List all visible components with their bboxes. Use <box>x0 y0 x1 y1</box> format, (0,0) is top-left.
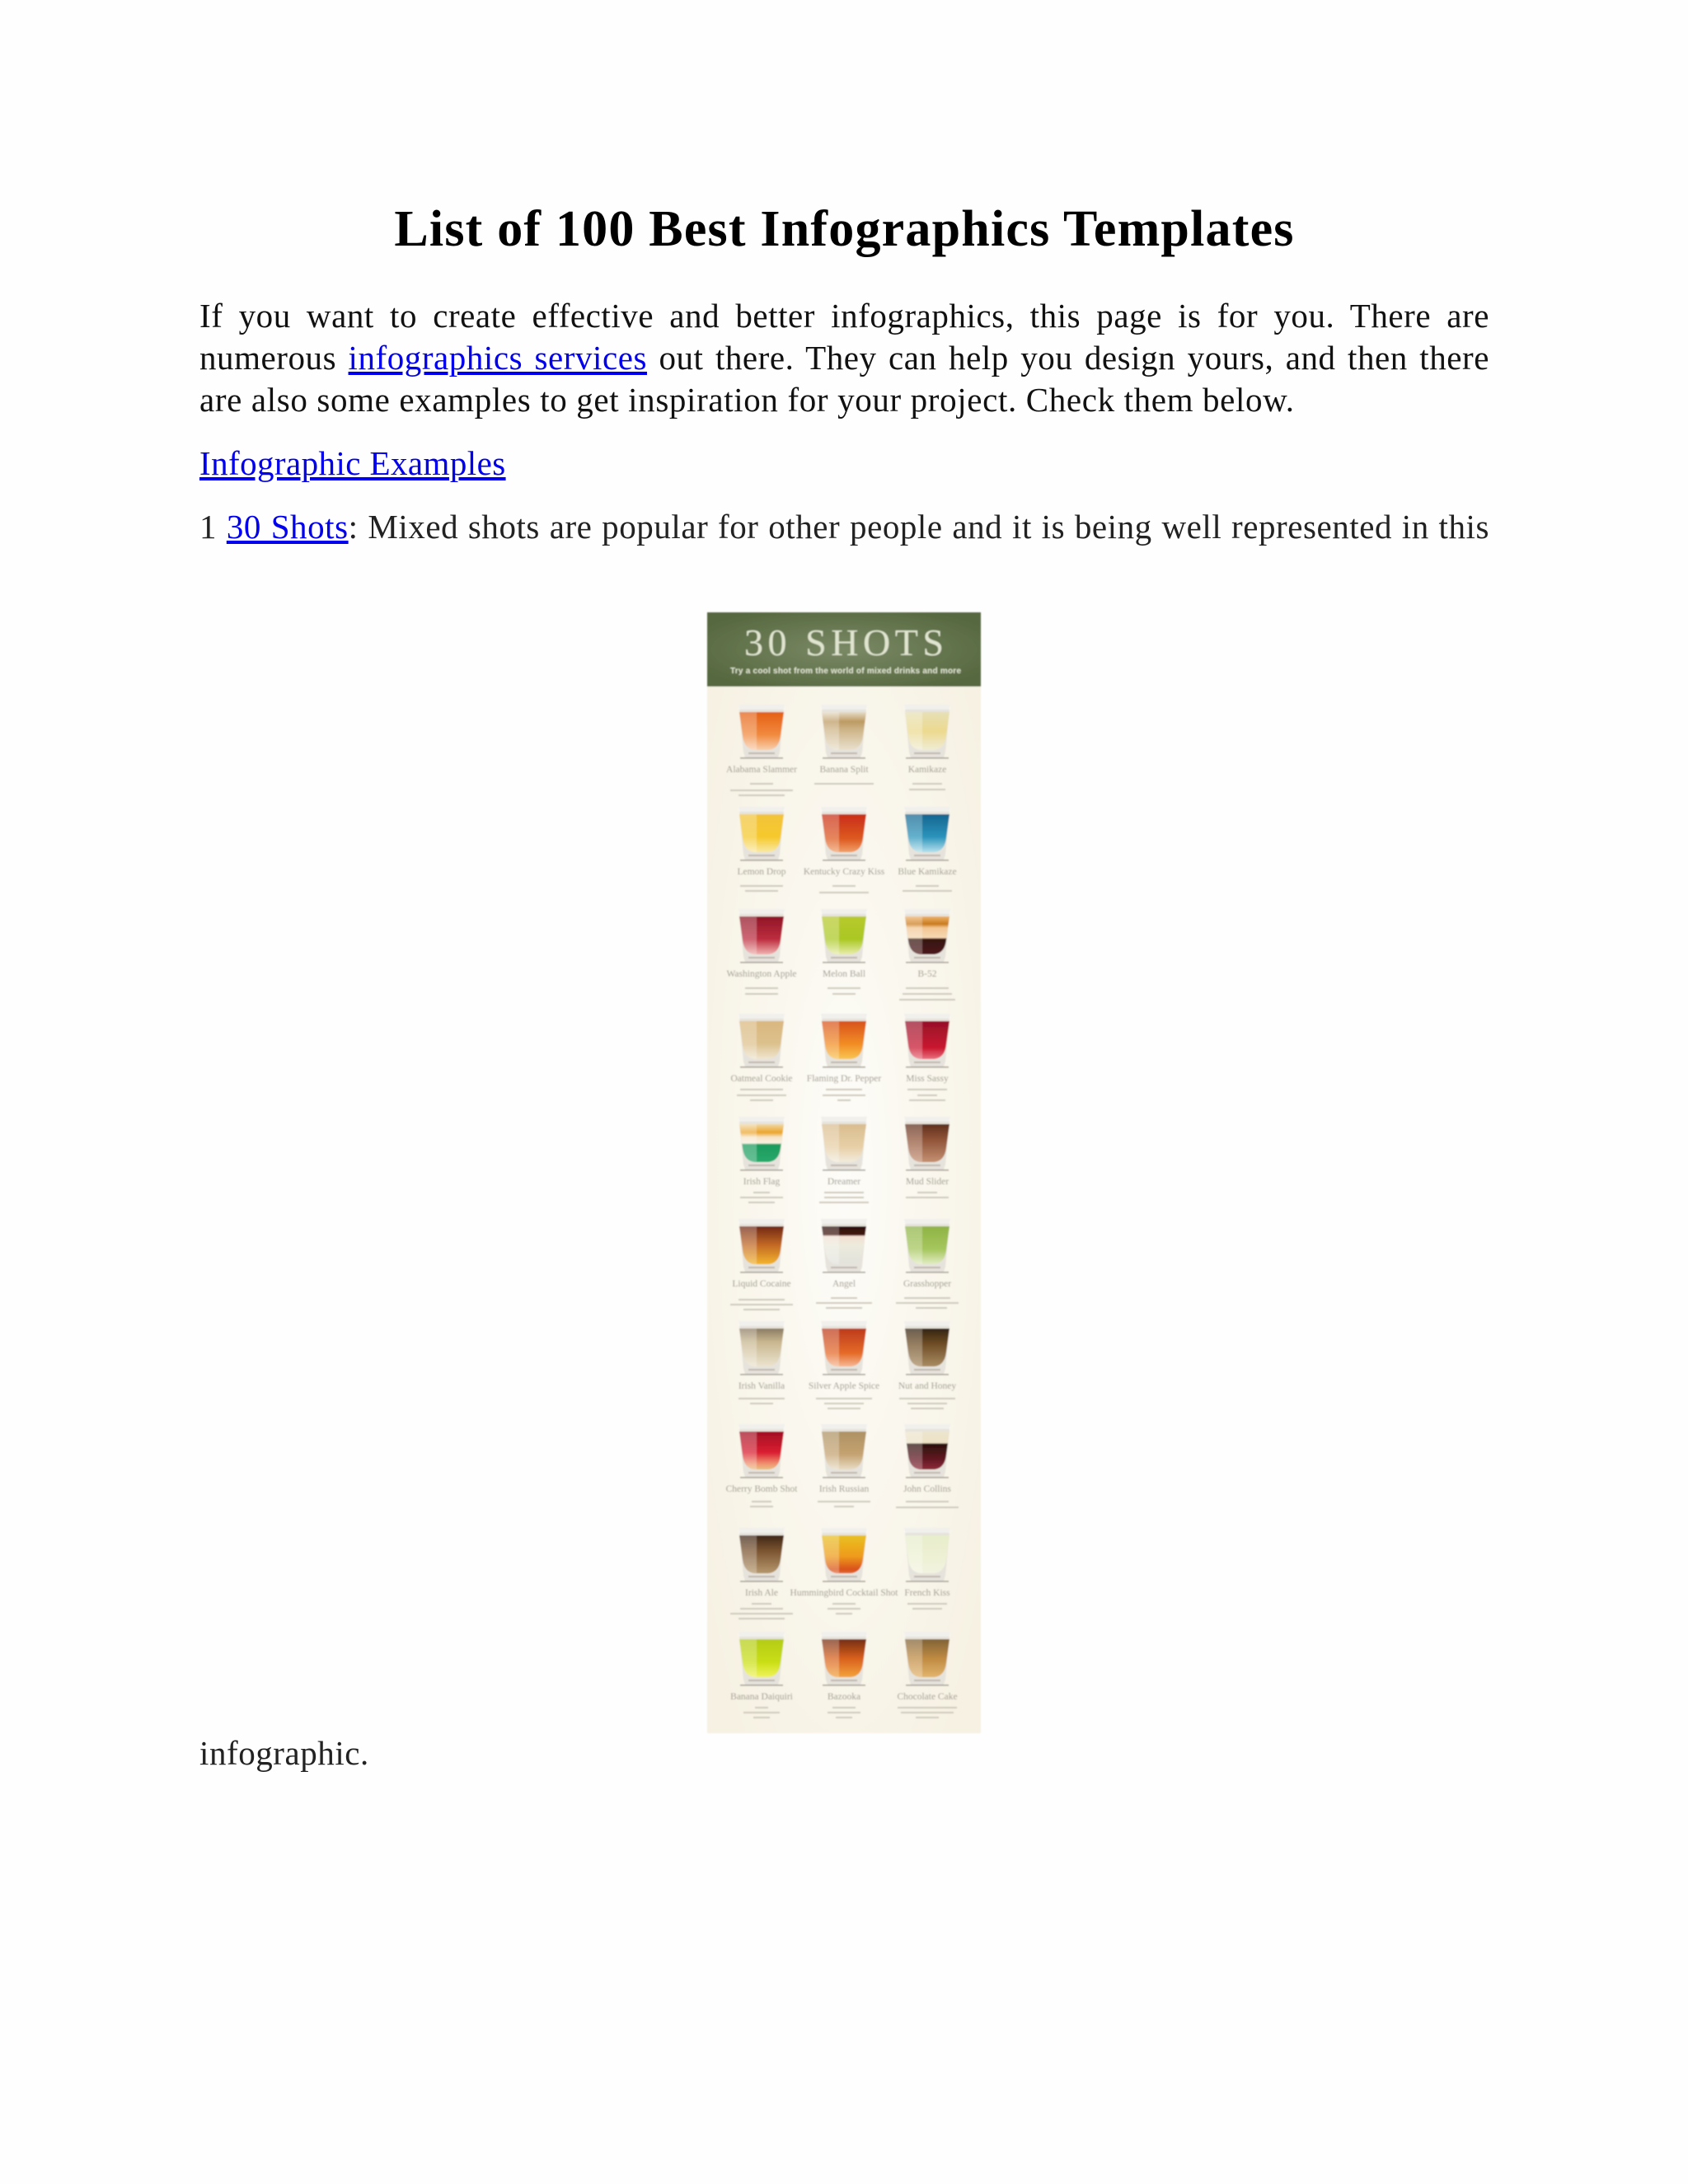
shot 29 <box>821 1632 867 1718</box>
section link: infographic examples: Infographic Examples <box>199 444 506 482</box>
shot 21: Nut and Honey <box>898 1381 956 1391</box>
shot 11: Flaming Dr. Pepper <box>807 1074 881 1084</box>
shot 4 <box>737 807 786 891</box>
shot 1: Alabama Slammer <box>726 765 797 775</box>
shot 9: B-52 <box>918 969 937 979</box>
shot 27 <box>904 1528 950 1609</box>
shot 14: Dreamer <box>828 1177 860 1187</box>
shot 19 <box>738 1321 785 1404</box>
shot 15 <box>904 1117 950 1197</box>
intro paragraph <box>199 297 1489 419</box>
shot 18 <box>896 1219 959 1308</box>
shot 25: Irish Ale <box>745 1588 778 1598</box>
shot 8 <box>821 909 867 994</box>
shot 4: Lemon Drop <box>737 867 786 877</box>
shot 15: Mud Slider <box>906 1177 949 1187</box>
shot 30: Chocolate Cake <box>897 1692 958 1702</box>
shot 26: Hummingbird Cocktail Shot <box>790 1588 898 1598</box>
shot 24 <box>896 1424 959 1507</box>
shot 19: Irish Vanilla <box>738 1381 785 1391</box>
shot 13 <box>738 1117 785 1202</box>
shot 6 <box>898 807 957 891</box>
shot 6: Blue Kamikaze <box>898 867 957 877</box>
shot 5 <box>804 807 885 893</box>
intro paragraph: If you want to create effective and better infographics, this page is for you. There are <box>199 297 1489 335</box>
shot 14 <box>819 1117 869 1202</box>
poster heading: 30 SHOTS <box>744 621 944 663</box>
shot 2 <box>814 705 874 784</box>
shot 17 <box>816 1219 872 1308</box>
shot 22: Cherry Bomb Shot <box>726 1484 798 1494</box>
shot 5: Kentucky Crazy Kiss <box>804 867 885 877</box>
shot 13: Irish Flag <box>743 1177 780 1187</box>
shot 22 <box>726 1424 798 1507</box>
poster header band <box>707 612 981 687</box>
shot 17: Angel <box>832 1279 856 1289</box>
shot 28: Banana Daiquiri <box>730 1692 793 1702</box>
shot 9 <box>899 909 955 1000</box>
shot 12: Miss Sassy <box>906 1074 949 1084</box>
shot 12 <box>904 1014 950 1100</box>
title: List of 100 Best Infographics Templates <box>394 201 1295 257</box>
shot 28 <box>730 1632 793 1718</box>
intro paragraph: are also some examples to get inspiration for your project. Check them below. <box>199 381 1295 419</box>
item 1 sentence: 1 30 Shots: Mixed shots are popular for other people and it is being well represented in this <box>199 508 1489 546</box>
shot 29: Bazooka <box>828 1692 860 1702</box>
shot 23: Irish Russian <box>819 1484 869 1494</box>
shot 26 <box>790 1528 898 1614</box>
shot 10 <box>730 1014 793 1100</box>
shot 18: Grasshopper <box>903 1279 951 1289</box>
poster background <box>707 612 981 1733</box>
shot 2: Banana Split <box>819 765 869 775</box>
intro paragraph: numerous infographics services out there. They can help you design yours, and then there <box>199 339 1489 377</box>
shot 23 <box>818 1424 870 1507</box>
shot 3: Kamikaze <box>908 765 946 775</box>
shot 11 <box>807 1014 881 1100</box>
shot 7 <box>727 909 796 994</box>
shot 3 <box>904 705 950 790</box>
poster subtitle: Try a cool shot from the world of mixed drinks and more <box>730 667 961 676</box>
shot 30 <box>897 1632 958 1718</box>
shot 24: John Collins <box>903 1484 951 1494</box>
shot 8: Melon Ball <box>823 969 865 979</box>
shot 7: Washington Apple <box>727 969 796 979</box>
shot 25 <box>730 1528 793 1619</box>
shot 27: French Kiss <box>904 1588 950 1598</box>
shot 16: Liquid Cocaine <box>732 1279 791 1289</box>
sentence end: infographic. <box>199 1734 369 1772</box>
shot 20 <box>809 1321 879 1408</box>
shot 1 <box>726 705 797 795</box>
shot 10: Oatmeal Cookie <box>730 1074 793 1084</box>
shot 21 <box>898 1321 956 1408</box>
shot 16 <box>730 1219 793 1310</box>
shot 20: Silver Apple Spice <box>809 1381 879 1391</box>
